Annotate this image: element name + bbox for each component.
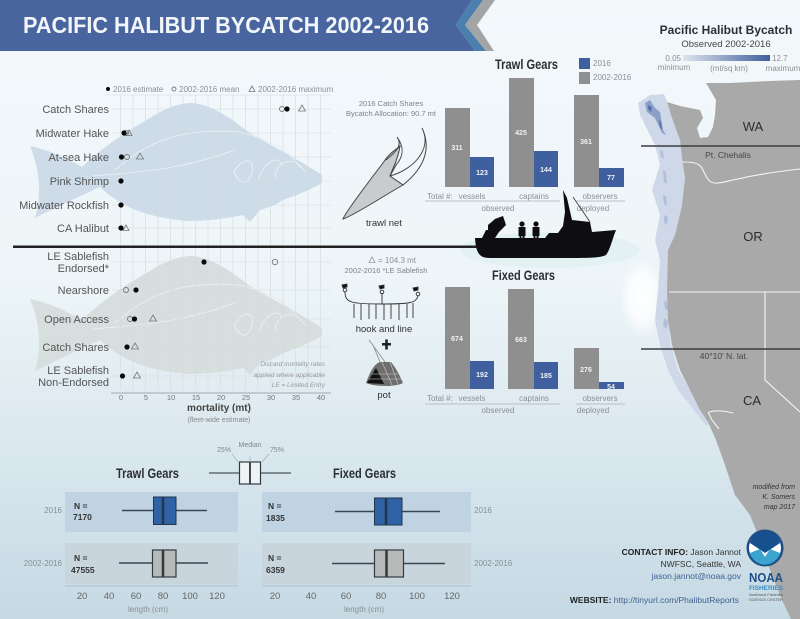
boxplot: trawl gears: 47555 xyxy=(71,565,95,575)
boxplot: fixed gears xyxy=(262,465,513,614)
note: LE = Limited Entry xyxy=(272,382,326,389)
bar chart: fixed gears: 54 xyxy=(607,384,615,391)
map credit xyxy=(753,484,796,511)
map colour scale: 0.05 xyxy=(665,54,682,63)
boxplot: trawl gears: 20 xyxy=(77,591,87,602)
bar chart: fixed gears: 276 xyxy=(580,367,592,374)
contact info xyxy=(622,547,742,581)
NOAA Fisheries wordmark: FISHERIES xyxy=(749,586,783,592)
bar legend: 2002-2016 xyxy=(593,73,632,82)
boxplot: fixed gears: 100 xyxy=(409,591,425,602)
map title xyxy=(660,23,792,50)
boxplot: trawl gears: 100 xyxy=(182,591,198,602)
rivers and state borders xyxy=(669,162,800,429)
contact info: NWFSC, Seattle, WA xyxy=(661,559,741,569)
trawl allocation note: Bycatch Allocation: 90.7 mt xyxy=(346,109,437,118)
x axis tick labels: 30 xyxy=(267,393,275,402)
fixed allocation note xyxy=(345,256,427,275)
boxplot: trawl gears: 80 xyxy=(158,591,168,602)
bar chart: trawl gears: 311 xyxy=(451,145,463,152)
bar chart: trawl gears: captains xyxy=(519,192,549,201)
x axis tick labels: 10 xyxy=(167,393,175,402)
bar chart: fixed gears: observed xyxy=(482,406,514,415)
boxplot legend: 25% xyxy=(217,447,231,454)
x axis tick labels: 35 xyxy=(292,393,300,402)
dot plot: (fleet-wide estimate) xyxy=(187,417,251,424)
bar chart: fixed gears xyxy=(425,267,625,415)
boxplot: trawl gears: length (cm) xyxy=(128,605,168,614)
bar chart: trawl gears: Total #: xyxy=(427,192,453,201)
note xyxy=(253,361,326,389)
state labels: OR xyxy=(743,229,763,244)
map colour scale: maximum xyxy=(766,64,800,73)
boxplot: fixed gears: 120 xyxy=(444,591,460,602)
boxplot: fixed gears: 2002-2016 xyxy=(474,559,513,568)
contact info: CONTACT INFO: Jason Jannot xyxy=(622,547,742,557)
NOAA Fisheries wordmark: SCIENCE CENTER xyxy=(749,598,784,602)
map colour scale xyxy=(658,54,800,73)
map credit: K. Somers xyxy=(762,494,795,501)
row labels: LE Sablefish xyxy=(47,365,109,377)
map credit: map 2017 xyxy=(764,504,796,511)
x axis title: mortality (mt) xyxy=(187,403,251,414)
bar chart: trawl gears: 77 xyxy=(607,175,615,182)
fixed allocation note: 2002-2016 *LE Sablefish xyxy=(345,266,427,275)
fixed allocation note: = 104.3 mt xyxy=(378,256,417,265)
header banner xyxy=(0,0,495,51)
bar chart: fixed gears: observers xyxy=(582,394,618,403)
boxplot: fixed gears: length (cm) xyxy=(344,605,384,614)
x axis tick labels: 25 xyxy=(242,393,250,402)
dot plot xyxy=(19,85,333,424)
heading: Fixed Gears xyxy=(492,267,555,283)
boxplot: fixed gears: 20 xyxy=(270,591,280,602)
bar chart: fixed gears: 185 xyxy=(540,373,552,380)
boxplot: trawl gears: 40 xyxy=(104,591,114,602)
dot plot legend: 2002-2016 mean xyxy=(179,85,240,94)
boxplot legend: Median xyxy=(239,442,262,449)
icon: pot: pot xyxy=(377,390,391,401)
bar chart: trawl gears: 361 xyxy=(580,139,592,146)
map title: Pacific Halibut Bycatch xyxy=(660,23,792,37)
row labels xyxy=(19,104,110,389)
map xyxy=(638,80,800,619)
state labels: CA xyxy=(743,393,761,408)
row labels: Catch Shares xyxy=(42,104,109,116)
latitude labels xyxy=(700,150,751,361)
dot plot legend xyxy=(106,85,333,94)
state labels xyxy=(743,119,764,408)
note: Discard mortality rates xyxy=(260,361,326,368)
heading: Trawl Gears xyxy=(495,56,558,72)
bar chart: fixed gears: 674 xyxy=(451,336,463,343)
boxplot: fixed gears: 40 xyxy=(306,591,316,602)
latitude labels: Pt. Chehalis xyxy=(705,150,751,160)
dot plot legend: 2002-2016 maximum xyxy=(258,85,333,94)
NOAA Fisheries wordmark: NOAA xyxy=(749,571,783,585)
x axis tick labels xyxy=(119,393,325,402)
boxplot: fixed gears: N = xyxy=(268,553,282,563)
boxplot legend: 75% xyxy=(270,447,284,454)
NOAA Fisheries wordmark xyxy=(749,571,784,602)
row labels: Midwater Rockfish xyxy=(19,200,109,212)
boxplot: fixed gears: N = xyxy=(268,501,282,511)
row labels: At-sea Hake xyxy=(48,152,109,164)
icon: fishing vessel xyxy=(475,190,616,258)
boxplot: trawl gears: 2002-2016 xyxy=(24,559,63,568)
map colour scale: (mt/sq km) xyxy=(710,64,748,73)
website: WEBSITE: http://tinyurl.com/PhalibutReports xyxy=(570,595,739,605)
latitude lines xyxy=(641,146,800,349)
title: PACIFIC HALIBUT BYCATCH 2002-2016 xyxy=(23,12,429,38)
bar chart: fixed gears: deployed xyxy=(577,406,609,415)
bar chart: trawl gears: observers xyxy=(582,192,618,201)
boxplot: fixed gears: 2016 xyxy=(474,506,492,515)
row labels: LE Sablefish xyxy=(47,251,109,263)
trawl allocation note xyxy=(346,99,437,118)
row labels: CA Halibut xyxy=(57,223,109,235)
divider line xyxy=(13,246,483,248)
x axis tick labels: 20 xyxy=(217,393,225,402)
data points xyxy=(118,105,306,379)
bar chart: fixed gears: Total #: xyxy=(427,394,453,403)
boxplot: trawl gears: 60 xyxy=(131,591,141,602)
boxplot: trawl gears: 120 xyxy=(209,591,225,602)
map title: Observed 2002-2016 xyxy=(681,39,771,50)
land xyxy=(667,80,800,619)
plus sign xyxy=(382,340,391,350)
boxplot: fixed gears: 6359 xyxy=(266,565,285,575)
x axis tick labels: 0 xyxy=(119,393,123,402)
fish: upper halibut silhouette xyxy=(30,103,322,222)
heading: Fixed Gears xyxy=(333,465,396,481)
trawl allocation note: 2016 Catch Shares xyxy=(359,99,423,108)
map colour scale: 12.7 xyxy=(772,54,788,63)
boxplot: trawl gears: 2016 xyxy=(44,506,63,515)
bar chart: trawl gears: 123 xyxy=(476,170,488,177)
row labels: Nearshore xyxy=(58,285,109,297)
row labels: Pink Shrimp xyxy=(50,176,109,188)
bar legend: 2016 xyxy=(593,59,611,68)
row labels: Open Access xyxy=(44,314,109,326)
contact info: jason.jannot@noaa.gov xyxy=(651,571,742,581)
row labels: Midwater Hake xyxy=(36,128,109,140)
fish: lower halibut silhouette xyxy=(30,256,322,375)
icon: pot xyxy=(366,340,403,401)
dot plot legend: 2016 estimate xyxy=(113,85,164,94)
latitude labels: 40°10' N. lat. xyxy=(700,351,748,361)
icon: trawl net: trawl net xyxy=(366,218,402,229)
x axis tick labels: 15 xyxy=(192,393,200,402)
bar legend xyxy=(579,58,632,84)
x axis tick labels: 5 xyxy=(144,393,148,402)
row labels: Endorsed* xyxy=(58,263,110,275)
icon: NOAA logo xyxy=(746,530,784,566)
icon: hook and line: hook and line xyxy=(356,324,412,335)
row labels: Catch Shares xyxy=(42,342,109,354)
state labels: WA xyxy=(743,119,764,134)
x axis tick labels: 40 xyxy=(317,393,325,402)
bar chart: fixed gears: 192 xyxy=(476,372,488,379)
bycatch density band xyxy=(638,94,715,425)
boxplot: trawl gears: N = xyxy=(74,501,88,511)
bar chart: trawl gears: deployed xyxy=(577,204,609,213)
boxplot: fixed gears: 1835 xyxy=(266,513,285,523)
row labels: Non-Endorsed xyxy=(38,377,109,389)
boxplot: trawl gears: N = xyxy=(74,553,88,563)
icon: hook and line xyxy=(342,284,420,335)
bar chart: trawl gears: 144 xyxy=(540,167,552,174)
map colour scale: minimum xyxy=(658,63,691,72)
heading: Trawl Gears xyxy=(116,465,179,481)
map credit: modified from xyxy=(753,484,795,491)
boxplot: fixed gears: 80 xyxy=(376,591,386,602)
boxplot legend xyxy=(209,442,291,484)
icon: trawl net xyxy=(343,128,426,229)
icon: people on deck xyxy=(518,221,540,242)
bar chart: trawl gears: vessels xyxy=(459,192,485,201)
bar chart: fixed gears: captains xyxy=(519,394,549,403)
bar chart: fixed gears: vessels xyxy=(459,394,485,403)
bar chart: trawl gears: 425 xyxy=(515,130,527,137)
bar chart: fixed gears: 663 xyxy=(515,337,527,344)
NOAA Fisheries wordmark: Northwest Fisheries xyxy=(749,593,783,597)
boxplot: trawl gears: 7170 xyxy=(73,512,92,522)
note: applied where applicable xyxy=(253,372,325,379)
boxplot: trawl gears xyxy=(24,465,238,614)
bar chart: trawl gears xyxy=(425,56,632,213)
boxplot: fixed gears: 60 xyxy=(341,591,351,602)
bar chart: trawl gears: observed xyxy=(482,204,514,213)
